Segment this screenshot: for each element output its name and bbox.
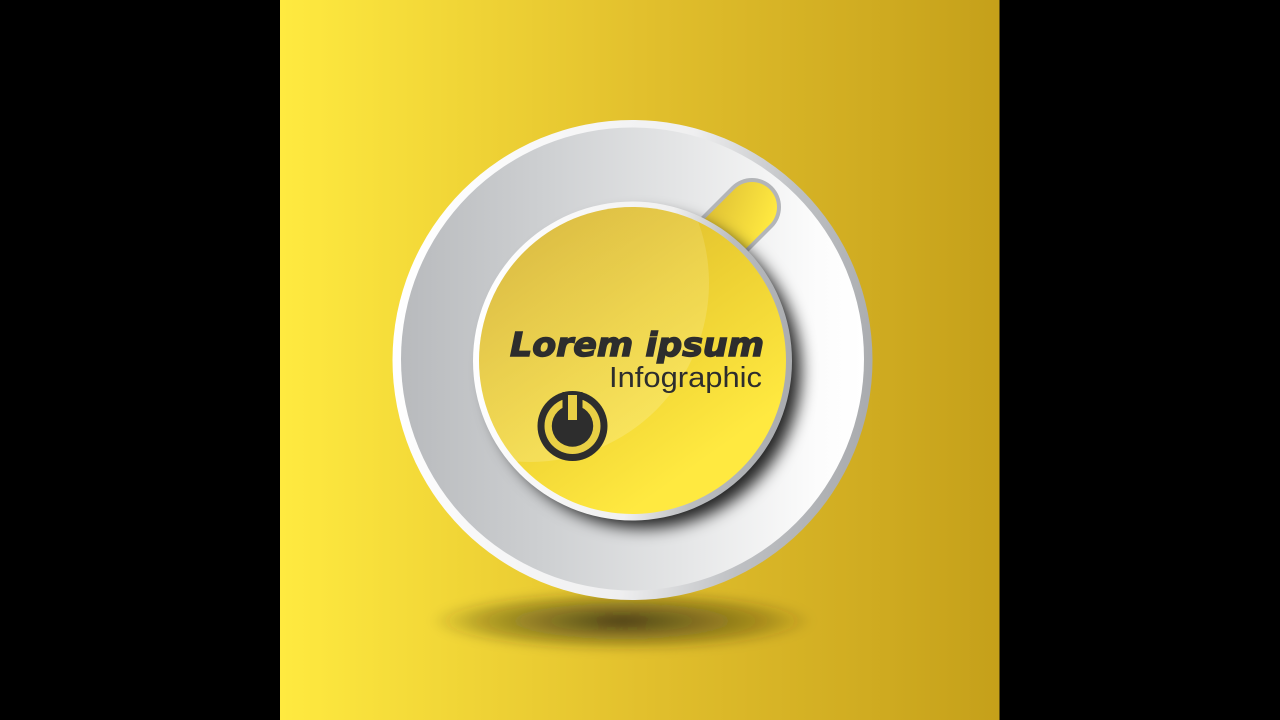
- yellow gradient background panel: [280, 0, 1000, 720]
- inner yellow disc: [473, 202, 792, 520]
- title: Lorem ipsum: Lorem ipsum: [510, 325, 764, 364]
- ground shadow: [430, 591, 814, 651]
- outer white dial: [392, 120, 872, 600]
- glass highlight: [479, 207, 709, 462]
- subtitle: Infographic: Infographic: [609, 362, 762, 394]
- infographic canvas: [280, 0, 1000, 720]
- icon: power symbol: [538, 391, 608, 461]
- tab: yellow capsule: [695, 207, 752, 264]
- inner disc drop shadow: [487, 214, 801, 528]
